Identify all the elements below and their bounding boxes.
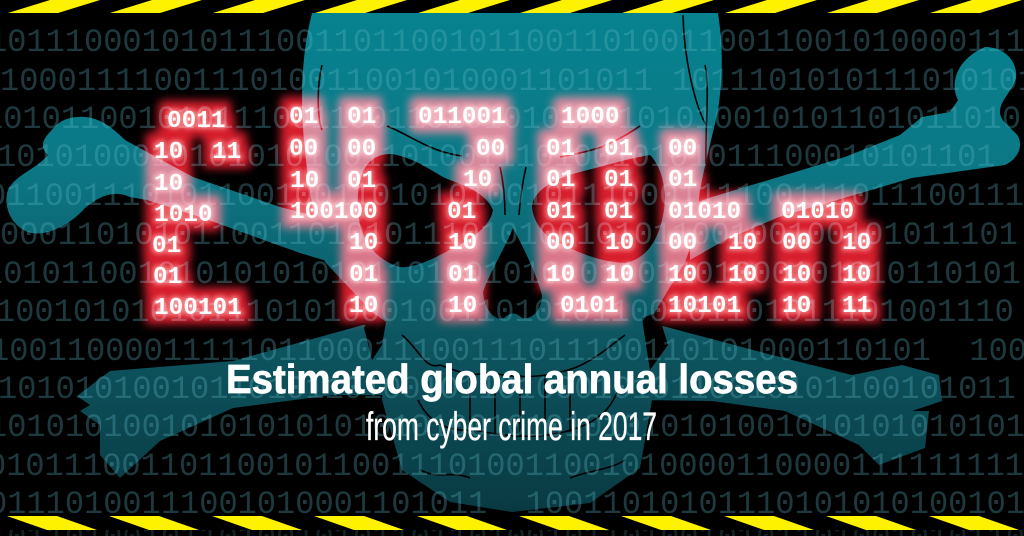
glowing binary figure: 01 — [289, 104, 318, 131]
glowing binary figure: 11 — [842, 293, 871, 320]
glowing binary figure: 00 — [347, 136, 376, 163]
glowing binary figure: 011001 — [418, 104, 506, 131]
upper right bone — [690, 47, 1020, 260]
glowing binary figure: 01 — [152, 233, 181, 260]
glowing binary figure: 01 — [604, 199, 633, 226]
heading: Estimated global annual losses — [226, 356, 798, 402]
hazard stripe: bottom band — [0, 516, 1024, 530]
glowing binary figure: 10 — [448, 230, 477, 257]
glowing binary figure: 00 — [289, 136, 318, 163]
binary background rows: 010111001101100101100111010011001010000110000111111111 — [0, 448, 1024, 485]
glowing binary figure: 10 — [728, 230, 757, 257]
glowing binary figure: 0101 — [560, 293, 619, 320]
glowing binary figure: 1000 — [561, 104, 620, 131]
glowing binary figure: 01 — [546, 199, 575, 226]
glowing binary figure: 01 — [668, 167, 697, 194]
glowing binary figure: 10 — [463, 167, 492, 194]
glowing binary figure: 00 — [782, 230, 811, 257]
subheading: from cyber crime in 2017 — [366, 405, 657, 449]
glowing binary figure: 10 — [605, 230, 634, 257]
glowing binary figure: 100101 — [154, 295, 242, 322]
lower right bone — [630, 325, 942, 465]
glowing binary figure: 01 — [347, 104, 376, 131]
binary background rows: 10101010010110101101001011010001010110010101100101011 — [0, 371, 1016, 408]
glowing binary figure — [152, 104, 871, 322]
glowing binary figure: 10 — [605, 262, 634, 289]
glowing binary figure: 01 — [153, 264, 182, 291]
glowing binary figure: 00 — [546, 230, 575, 257]
glowing binary figure: 01 — [349, 262, 378, 289]
glowing binary figure: 10 — [448, 293, 477, 320]
hazard stripe: top yellow — [8, 0, 1022, 13]
lower left bone — [77, 325, 400, 478]
hazard stripe: top — [0, 0, 1024, 13]
left eye socket — [358, 154, 493, 267]
skull — [302, 13, 722, 512]
jaw shadows — [364, 312, 668, 370]
glowing binary figure: 10101 — [668, 293, 741, 320]
right eye socket — [532, 155, 665, 263]
glowing binary figure: 01 — [604, 167, 633, 194]
nose cavity — [483, 228, 542, 319]
binary background rows: 101010100101010101010101001010101010101001010101010101 — [0, 409, 1024, 446]
glowing binary figure: 01 — [604, 136, 633, 163]
glowing binary figure: 10 — [546, 262, 575, 289]
glowing binary figure: 10 — [154, 139, 183, 166]
glowing binary figure: 10 — [842, 230, 871, 257]
binary background rows: 1010100010101010100110100111010010101011100010101101 — [0, 139, 996, 176]
glowing binary figure: 1010 — [154, 202, 213, 229]
glowing binary figure: 01 — [546, 136, 575, 163]
upper left bone — [6, 117, 330, 262]
glowing binary figure: 10 — [842, 262, 871, 289]
glowing binary figure: 11 — [212, 139, 241, 166]
glowing binary figure: 10 — [728, 262, 757, 289]
binary background rows: 00011010101100110101011101010010101100100100101011101 — [0, 217, 1018, 254]
glowing binary figure: 10 — [782, 262, 811, 289]
binary background rows: 011001110101100100110101010010111000111100111011100111 — [0, 178, 1024, 215]
glowing binary figure: 01 — [447, 199, 476, 226]
glowing binary figure: 01010 — [668, 199, 741, 226]
glowing binary figure: 10 — [349, 230, 378, 257]
binary background rows: 10010101010111010100010011010101100101101011101001110 — [0, 294, 1014, 331]
binary background rows: 101011001010111001100110101010110101010010101101011010 — [0, 101, 1021, 138]
binary background rows: 101011001010101010101101001010101101101000101010110101 — [0, 256, 1021, 293]
glowing binary figure: 00 — [476, 136, 505, 163]
glowing binary figure: 00 — [668, 230, 697, 257]
hazard stripe: bottom yellow — [7, 516, 1019, 530]
glowing binary figure: 0011 — [167, 108, 226, 135]
glowing binary figure: 00 — [668, 136, 697, 163]
glowing binary figure: 10 — [290, 168, 319, 195]
glowing binary figure: 10 — [349, 293, 378, 320]
glowing binary figure: 01 — [546, 167, 575, 194]
glowing binary figure: 100100 — [290, 199, 378, 226]
glowing binary figure: 01 — [448, 262, 477, 289]
glowing binary figure: 10 — [782, 293, 811, 320]
skull line details — [318, 15, 707, 478]
glowing binary figure: 10 — [668, 262, 697, 289]
glowing binary figure: 01010 — [781, 199, 854, 226]
glowing binary figure: 01 — [347, 168, 376, 195]
glowing binary figure: 10 — [154, 171, 183, 198]
